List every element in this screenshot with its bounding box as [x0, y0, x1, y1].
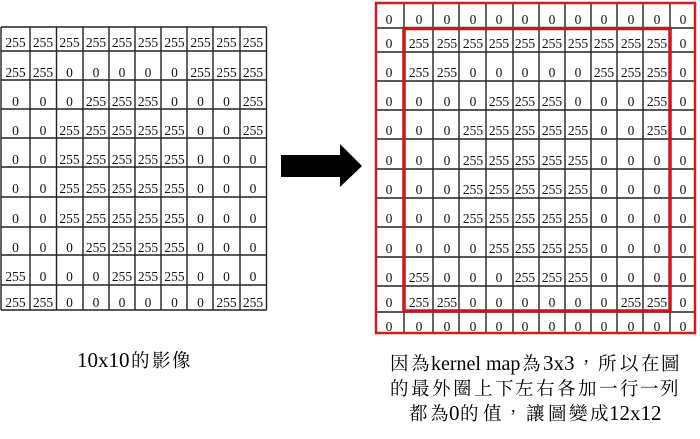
panel: 10x10 image grid: 255	[164, 152, 185, 167]
panel: 10x10 image grid: 255	[59, 123, 80, 138]
panel: 12x12 padded grid: 255	[463, 211, 483, 226]
panel: 12x12 padded grid: 0	[654, 182, 661, 197]
panel: 10x10 image grid	[1, 27, 266, 310]
panel: 12x12 padded grid: 255	[542, 94, 562, 109]
panel: 12x12 padded grid: 0	[496, 65, 503, 80]
caption: padding explanation: 的最外圈上下左右各加一行一列	[390, 379, 679, 400]
panel: 10x10 image grid: 255	[112, 35, 132, 50]
panel: 10x10 image grid: 255	[164, 35, 185, 50]
panel: 12x12 padded grid: 0	[386, 211, 393, 226]
panel: 12x12 padded grid: 0	[470, 12, 477, 27]
panel: 10x10 image grid: 0	[171, 65, 178, 80]
panel: 12x12 padded grid: 255	[515, 36, 535, 51]
panel: 10x10 image grid: 255	[164, 269, 185, 284]
caption: padding explanation: 3x3	[543, 351, 574, 375]
panel: 12x12 padded grid: 0	[386, 319, 393, 334]
panel: 12x12 padded grid: 0	[386, 65, 393, 80]
panel: 12x12 padded grid: 255	[409, 270, 429, 285]
panel: 10x10 image grid: 255	[243, 94, 263, 109]
caption: padding explanation: 12x12	[609, 401, 662, 425]
panel: 12x12 padded grid: 0	[654, 241, 661, 256]
panel: 12x12 padded grid: 0	[522, 65, 529, 80]
panel: 10x10 image grid: 255	[5, 295, 26, 310]
panel: 12x12 padded grid: 0	[628, 319, 635, 334]
panel: 12x12 padded grid: 0	[601, 12, 608, 27]
panel: 12x12 padded grid: 255	[515, 182, 535, 197]
panel: 10x10 image grid: 255	[138, 269, 158, 284]
panel: 12x12 padded grid: 0	[601, 241, 608, 256]
panel: 12x12 padded grid: 0	[416, 241, 423, 256]
panel: 12x12 padded grid: 0	[680, 319, 687, 334]
panel: 10x10 image grid: 0	[40, 269, 47, 284]
panel: 12x12 padded grid: 0	[470, 65, 477, 80]
panel: 12x12 padded grid: 0	[601, 211, 608, 226]
panel: 12x12 padded grid: 0	[416, 319, 423, 334]
panel: 10x10 image grid: 255	[190, 35, 211, 50]
panel: 12x12 padded grid: 0	[386, 182, 393, 197]
panel: 10x10 image grid: 0	[40, 152, 47, 167]
red frame: outer padded border	[376, 3, 695, 333]
panel: 12x12 padded grid: 0	[680, 270, 687, 285]
panel: 10x10 image grid: 0	[93, 65, 100, 80]
panel: 10x10 image grid: 255	[112, 240, 132, 255]
panel: 12x12 padded grid: 255	[437, 65, 457, 80]
panel: 12x12 padded grid: 0	[386, 36, 393, 51]
panel: 10x10 image grid: 255	[86, 35, 106, 50]
panel: 10x10 image grid: 0	[223, 181, 230, 196]
panel: 10x10 image grid: 0	[12, 152, 19, 167]
panel: 10x10 image grid: 255	[112, 211, 132, 226]
panel: 12x12 padded grid: 0	[601, 94, 608, 109]
panel: 12x12 padded grid: 0	[628, 211, 635, 226]
panel: 10x10 image grid: 255	[112, 181, 132, 196]
panel: 10x10 image grid: 0	[66, 269, 73, 284]
panel: 10x10 image grid: 0	[93, 295, 100, 310]
panel: 10x10 image grid: 255	[243, 65, 263, 80]
panel: 10x10 image grid: 0	[171, 295, 178, 310]
panel: 10x10 image grid: 255	[33, 35, 53, 50]
panel: 12x12 padded grid: 255	[568, 182, 588, 197]
panel: 12x12 padded grid: 255	[409, 36, 429, 51]
panel: 12x12 padded grid: 0	[549, 295, 556, 310]
panel: 12x12 padded grid: 0	[628, 94, 635, 109]
panel: 10x10 image grid: 0	[250, 269, 257, 284]
panel: 12x12 padded grid: 255	[568, 241, 588, 256]
panel: 12x12 padded grid: 255	[515, 153, 535, 168]
panel: 12x12 padded grid: 0	[680, 36, 687, 51]
panel: 10x10 image grid: 0	[197, 152, 204, 167]
panel: 10x10 image grid: 255	[138, 123, 158, 138]
panel: 10x10 image grid: 255	[190, 65, 211, 80]
panel: 10x10 image grid: 255	[59, 211, 80, 226]
panel: 10x10 image grid: 0	[223, 269, 230, 284]
panel: 12x12 padded grid: 0	[575, 12, 582, 27]
panel: 12x12 padded grid: 0	[680, 241, 687, 256]
panel: 10x10 image grid: 0	[12, 123, 19, 138]
panel: 12x12 padded grid: 0	[654, 12, 661, 27]
panel: 12x12 padded grid: 0	[680, 94, 687, 109]
panel: 12x12 padded grid: 255	[647, 94, 667, 109]
caption: padding explanation: 都為	[409, 404, 449, 425]
panel: 10x10 image grid: 0	[66, 295, 73, 310]
panel: 10x10 image grid: 255	[164, 211, 185, 226]
panel: 12x12 padded grid: 0	[628, 123, 635, 138]
panel: 12x12 padded grid: 255	[568, 211, 588, 226]
panel: 12x12 padded grid: 255	[647, 36, 667, 51]
panel: 10x10 image grid: 0	[40, 211, 47, 226]
panel: 12x12 padded grid: 0	[496, 270, 503, 285]
panel: 12x12 padded grid: 255	[621, 36, 641, 51]
panel: 12x12 padded grid: 255	[515, 241, 535, 256]
panel: 12x12 padded grid: 0	[386, 295, 393, 310]
panel: 12x12 padded grid: 255	[647, 123, 667, 138]
caption: padding explanation: ，所以在圖	[577, 354, 680, 375]
panel: 12x12 padded grid	[376, 3, 695, 334]
panel: 12x12 padded grid: 0	[386, 94, 393, 109]
panel: 10x10 image grid: 0	[250, 181, 257, 196]
panel: 12x12 padded grid: 0	[444, 211, 451, 226]
panel: 12x12 padded grid: 255	[489, 94, 509, 109]
panel: 12x12 padded grid: 0	[416, 182, 423, 197]
panel: 12x12 padded grid: 255	[647, 295, 667, 310]
panel: 12x12 padded grid: 255	[594, 36, 614, 51]
panel: 12x12 padded grid: 0	[680, 295, 687, 310]
panel: 12x12 padded grid: 255	[489, 211, 509, 226]
panel: 12x12 padded grid: 0	[522, 12, 529, 27]
panel: 12x12 padded grid: 255	[489, 182, 509, 197]
caption: 10x10 image: 10x10	[77, 348, 130, 372]
panel: 12x12 padded grid: 0	[386, 153, 393, 168]
panel: 10x10 image grid: 0	[250, 152, 257, 167]
panel: 10x10 image grid: 255	[59, 181, 80, 196]
panel: 10x10 image grid: 0	[223, 123, 230, 138]
panel: 12x12 padded grid: 0	[601, 182, 608, 197]
panel: 12x12 padded grid: 255	[568, 36, 588, 51]
panel: 10x10 image grid: 255	[112, 123, 132, 138]
caption: 10x10 image: 的影像	[131, 351, 191, 372]
panel: 12x12 padded grid: 0	[470, 270, 477, 285]
panel: 12x12 padded grid: 255	[515, 123, 535, 138]
panel: 10x10 image grid: 0	[223, 94, 230, 109]
panel: 12x12 padded grid: 0	[522, 295, 529, 310]
red frame: original 10x10 area	[404, 28, 670, 311]
panel: 10x10 image grid: 255	[164, 123, 185, 138]
panel: 10x10 image grid: 255	[138, 240, 158, 255]
panel: 10x10 image grid: 0	[223, 152, 230, 167]
panel: 12x12 padded grid: 0	[416, 211, 423, 226]
panel: 12x12 padded grid: 255	[463, 153, 483, 168]
panel: 12x12 padded grid: 0	[470, 295, 477, 310]
panel: 10x10 image grid: 255	[138, 152, 158, 167]
panel: 12x12 padded grid: 0	[470, 94, 477, 109]
panel: 12x12 padded grid: 255	[409, 295, 429, 310]
arrow: right	[281, 144, 362, 187]
panel: 10x10 image grid: 255	[86, 152, 106, 167]
panel: 10x10 image grid: 0	[250, 240, 257, 255]
caption: padding explanation: 0	[449, 401, 460, 425]
panel: 10x10 image grid: 255	[164, 181, 185, 196]
panel: 10x10 image grid: 0	[197, 94, 204, 109]
panel: 10x10 image grid: 255	[138, 181, 158, 196]
panel: 12x12 padded grid: 0	[680, 123, 687, 138]
panel: 10x10 image grid: 255	[112, 94, 132, 109]
panel: 10x10 image grid: 255	[86, 181, 106, 196]
panel: 12x12 padded grid: 255	[463, 182, 483, 197]
panel: 12x12 padded grid: 0	[680, 12, 687, 27]
panel: 12x12 padded grid: 0	[575, 65, 582, 80]
panel: 12x12 padded grid: 255	[542, 270, 562, 285]
panel: 12x12 padded grid: 0	[680, 211, 687, 226]
panel: 10x10 image grid: 0	[12, 181, 19, 196]
panel: 12x12 padded grid: 0	[601, 153, 608, 168]
panel: 12x12 padded grid: 0	[444, 123, 451, 138]
panel: 10x10 image grid: 0	[145, 295, 152, 310]
panel: 10x10 image grid: 255	[86, 240, 106, 255]
panel: 12x12 padded grid: 255	[594, 65, 614, 80]
panel: 10x10 image grid: 0	[223, 240, 230, 255]
panel: 10x10 image grid: 255	[138, 94, 158, 109]
panel: 12x12 padded grid: 0	[386, 241, 393, 256]
panel: 10x10 image grid: 0	[171, 94, 178, 109]
panel: 10x10 image grid: 255	[5, 269, 26, 284]
panel: 12x12 padded grid: 255	[515, 94, 535, 109]
panel: 10x10 image grid: 0	[12, 211, 19, 226]
panel: 12x12 padded grid: 0	[601, 319, 608, 334]
panel: 10x10 image grid: 0	[66, 240, 73, 255]
panel: 12x12 padded grid: 255	[542, 241, 562, 256]
panel: 12x12 padded grid: 255	[542, 36, 562, 51]
panel: 10x10 image grid: 0	[223, 211, 230, 226]
panel: 10x10 image grid: 255	[33, 65, 53, 80]
panel: 10x10 image grid: 0	[197, 295, 204, 310]
panel: 12x12 padded grid: 0	[654, 270, 661, 285]
panel: 12x12 padded grid: 0	[470, 241, 477, 256]
panel: 10x10 image grid: 0	[197, 240, 204, 255]
panel: 12x12 padded grid: 0	[601, 123, 608, 138]
panel: 12x12 padded grid: 255	[542, 211, 562, 226]
panel: 12x12 padded grid: 0	[628, 241, 635, 256]
panel: 12x12 padded grid: 0	[654, 319, 661, 334]
panel: 12x12 padded grid: 0	[444, 94, 451, 109]
panel: 10x10 image grid: 255	[33, 295, 53, 310]
panel: 12x12 padded grid: 0	[654, 211, 661, 226]
panel: 10x10 image grid: 255	[216, 65, 237, 80]
panel: 10x10 image grid: 0	[197, 123, 204, 138]
panel: 12x12 padded grid: 255	[542, 123, 562, 138]
caption: padding explanation: 為	[522, 354, 541, 375]
panel: 10x10 image grid: 0	[197, 211, 204, 226]
panel: 10x10 image grid: 0	[40, 181, 47, 196]
panel: 10x10 image grid: 255	[243, 35, 263, 50]
panel: 12x12 padded grid: 0	[628, 153, 635, 168]
panel: 12x12 padded grid: 0	[601, 295, 608, 310]
panel: 12x12 padded grid: 0	[444, 182, 451, 197]
panel: 10x10 image grid: 255	[59, 152, 80, 167]
caption: padding explanation	[390, 351, 680, 425]
panel: 12x12 padded grid: 0	[444, 153, 451, 168]
panel: 10x10 image grid: 0	[12, 94, 19, 109]
panel: 10x10 image grid: 255	[138, 35, 158, 50]
panel: 10x10 image grid: 255	[86, 94, 106, 109]
panel: 10x10 image grid: 0	[40, 240, 47, 255]
panel: 12x12 padded grid: 0	[575, 94, 582, 109]
panel: 10x10 image grid: 255	[216, 35, 237, 50]
panel: 12x12 padded grid: 0	[416, 153, 423, 168]
panel: 10x10 image grid: 0	[93, 269, 100, 284]
panel: 12x12 padded grid: 0	[496, 295, 503, 310]
caption: padding explanation: kernel map	[431, 353, 520, 375]
panel: 10x10 image grid: 255	[243, 123, 263, 138]
panel: 12x12 padded grid: 255	[463, 36, 483, 51]
panel: 12x12 padded grid: 255	[463, 123, 483, 138]
panel: 10x10 image grid: 255	[243, 295, 263, 310]
panel: 10x10 image grid: 255	[5, 65, 26, 80]
panel: 12x12 padded grid: 0	[416, 12, 423, 27]
panel: 12x12 padded grid: 255	[542, 182, 562, 197]
panel: 10x10 image grid: 255	[86, 123, 106, 138]
panel: 10x10 image grid: 0	[40, 123, 47, 138]
panel: 12x12 padded grid: 0	[549, 65, 556, 80]
panel: 10x10 image grid: 0	[250, 211, 257, 226]
panel: 10x10 image grid: 0	[119, 65, 126, 80]
panel: 12x12 padded grid: 0	[628, 182, 635, 197]
panel: 12x12 padded grid: 0	[575, 295, 582, 310]
panel: 12x12 padded grid: 0	[680, 153, 687, 168]
panel: 12x12 padded grid: 0	[654, 153, 661, 168]
panel: 12x12 padded grid: 0	[680, 182, 687, 197]
panel: 12x12 padded grid: 0	[549, 319, 556, 334]
panel: 12x12 padded grid: 0	[470, 319, 477, 334]
panel: 12x12 padded grid: 0	[386, 12, 393, 27]
panel: 12x12 padded grid: 0	[628, 270, 635, 285]
panel: 10x10 image grid: 255	[112, 269, 132, 284]
panel: 10x10 image grid: 255	[216, 295, 237, 310]
panel: 10x10 image grid: 255	[112, 152, 132, 167]
panel: 12x12 padded grid: 255	[568, 123, 588, 138]
panel: 12x12 padded grid: 0	[416, 123, 423, 138]
panel: 12x12 padded grid: 255	[437, 295, 457, 310]
panel: 10x10 image grid: 0	[119, 295, 126, 310]
panel: 12x12 padded grid: 255	[489, 153, 509, 168]
panel: 12x12 padded grid: 0	[386, 123, 393, 138]
panel: 12x12 padded grid: 255	[542, 153, 562, 168]
panel: 12x12 padded grid: 255	[568, 153, 588, 168]
panel: 12x12 padded grid: 0	[386, 270, 393, 285]
panel: 10x10 image grid: 255	[59, 35, 80, 50]
panel: 12x12 padded grid: 255	[489, 241, 509, 256]
panel: 10x10 image grid: 0	[66, 65, 73, 80]
panel: 12x12 padded grid: 0	[522, 319, 529, 334]
panel: 10x10 image grid: 255	[5, 35, 26, 50]
panel: 12x12 padded grid: 0	[601, 270, 608, 285]
panel: 12x12 padded grid: 255	[515, 270, 535, 285]
panel: 10x10 image grid: 0	[145, 65, 152, 80]
panel: 12x12 padded grid: 255	[621, 295, 641, 310]
panel: 12x12 padded grid: 0	[416, 94, 423, 109]
panel: 12x12 padded grid: 0	[444, 270, 451, 285]
panel: 10x10 image grid: 0	[197, 181, 204, 196]
panel: 12x12 padded grid: 255	[568, 270, 588, 285]
panel: 12x12 padded grid: 255	[437, 36, 457, 51]
panel: 12x12 padded grid: 255	[647, 65, 667, 80]
panel: 12x12 padded grid: 0	[444, 319, 451, 334]
panel: 12x12 padded grid: 255	[489, 36, 509, 51]
panel: 12x12 padded grid: 0	[549, 12, 556, 27]
panel: 12x12 padded grid: 0	[575, 319, 582, 334]
caption: padding explanation: 因為	[390, 354, 430, 375]
panel: 12x12 padded grid: 0	[496, 319, 503, 334]
panel: 12x12 padded grid: 0	[496, 12, 503, 27]
caption: padding explanation: 的值，讓圖變成	[460, 404, 609, 425]
panel: 10x10 image grid: 255	[138, 211, 158, 226]
panel: 12x12 padded grid: 0	[628, 12, 635, 27]
panel: 12x12 padded grid: 0	[680, 65, 687, 80]
panel: 12x12 padded grid: 0	[444, 241, 451, 256]
panel: 12x12 padded grid: 255	[409, 65, 429, 80]
panel: 12x12 padded grid: 255	[515, 211, 535, 226]
panel: 12x12 padded grid: 255	[621, 65, 641, 80]
panel: 12x12 padded grid: 0	[444, 12, 451, 27]
panel: 10x10 image grid: 255	[164, 240, 185, 255]
panel: 12x12 padded grid: 255	[489, 123, 509, 138]
panel: 10x10 image grid: 255	[86, 211, 106, 226]
panel: 10x10 image grid: 0	[66, 94, 73, 109]
panel: 10x10 image grid: 0	[40, 94, 47, 109]
panel: 10x10 image grid: 0	[197, 269, 204, 284]
panel: 10x10 image grid: 0	[12, 240, 19, 255]
